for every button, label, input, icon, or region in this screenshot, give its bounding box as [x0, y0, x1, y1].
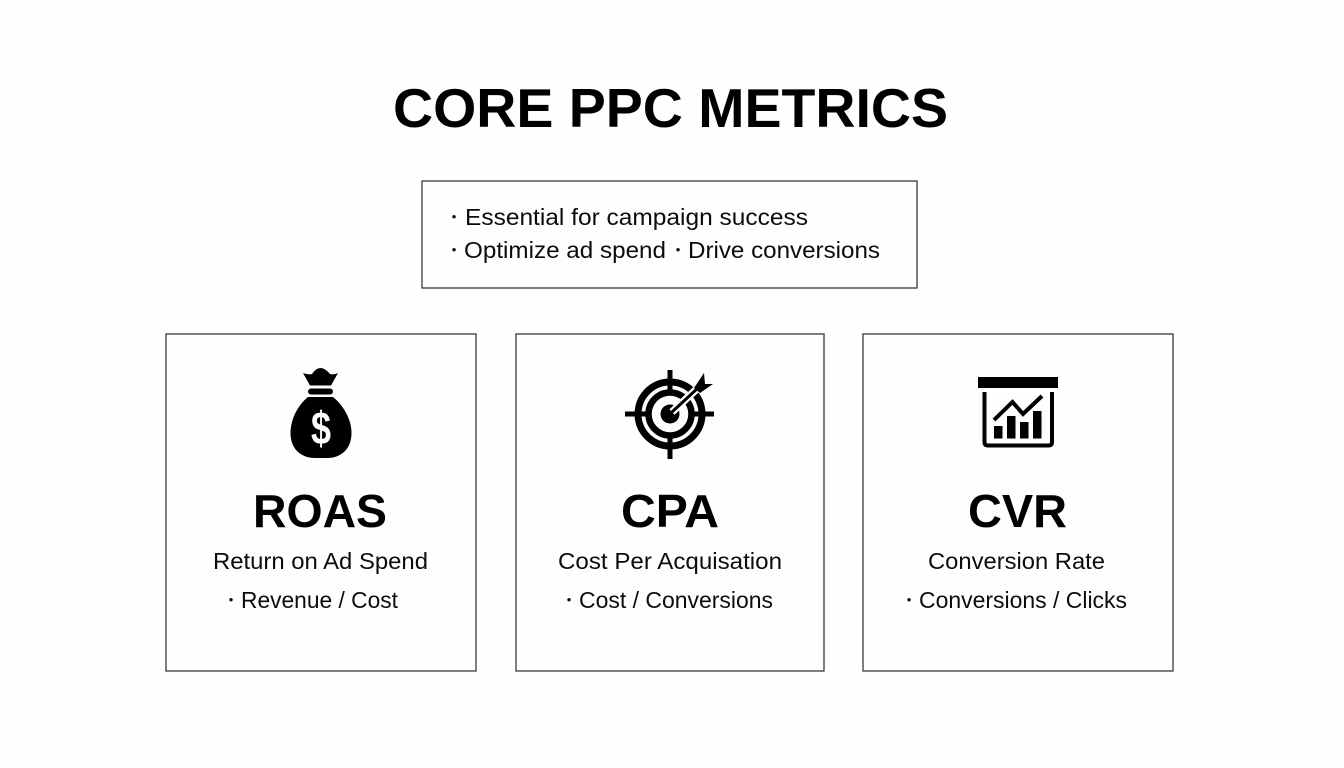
text: essential for campaign success: Essential for campaign success	[465, 204, 808, 230]
heading: ROAS: ROAS	[253, 485, 387, 537]
icon: chart board	[978, 377, 1058, 446]
text: cost per acquisation: Cost Per Acquisation	[558, 548, 782, 574]
panel: CPA	[516, 334, 824, 671]
text: revenue over cost: •	[229, 592, 234, 607]
text: conversions over clicks: Conversions / Clicks	[919, 587, 1127, 613]
heading: CPA: CPA	[621, 485, 719, 537]
text: optimize ad spend and drive conversions	[452, 237, 880, 263]
icon: target with arrow	[625, 370, 714, 459]
text: cost over conversions: •	[567, 592, 572, 607]
text: optimize ad spend and drive conversions: •	[452, 242, 457, 257]
panel: CVR	[863, 334, 1173, 671]
text: conversions over clicks: •	[907, 592, 912, 607]
heading: CVR: CVR	[968, 485, 1067, 537]
text: optimize ad spend and drive conversions: •	[676, 242, 681, 257]
text: revenue over cost: Revenue / Cost	[241, 587, 399, 613]
title: CORE PPC METRICS	[393, 77, 948, 139]
text: conversion rate: Conversion Rate	[928, 548, 1105, 574]
panel: summary	[422, 181, 917, 288]
icon: money bag	[290, 368, 352, 458]
text: essential for campaign success: •	[452, 209, 457, 224]
icon: money bag: $	[311, 402, 331, 454]
text: return on ad spend: Return on Ad Spend	[213, 548, 428, 574]
panel: ROAS	[166, 334, 476, 671]
text: optimize ad spend and drive conversions: Optimize ad spend	[464, 237, 666, 263]
text: cost over conversions: Cost / Conversions	[579, 587, 773, 613]
text: optimize ad spend and drive conversions: Drive conversions	[688, 237, 880, 263]
